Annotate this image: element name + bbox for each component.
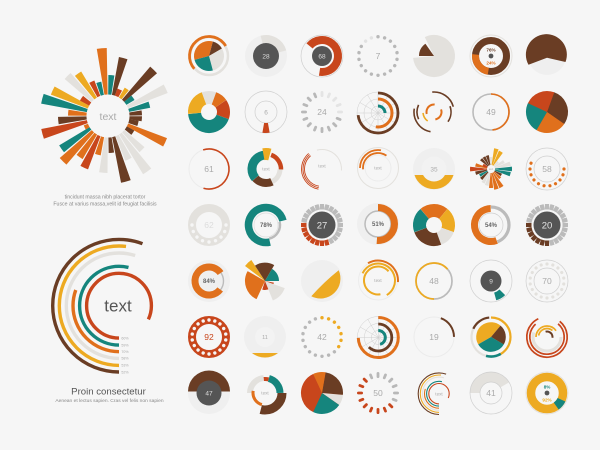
row 1: red ring 68: 68 xyxy=(318,53,326,60)
large concentric arc chart: 58% xyxy=(121,357,129,361)
row 5: yellow arcs text xyxy=(351,253,405,308)
row 3: orange arcs text xyxy=(358,148,398,188)
row 6: disc 11 with yellow sliver xyxy=(244,316,286,358)
row 1: pie with orange ring xyxy=(181,28,237,84)
sunburst caption: Fusce at varius massa,velit id feugiat facilisis xyxy=(53,202,157,208)
row 4: teal ring 78% xyxy=(245,204,287,246)
row 7: brown half disc 47: 47 xyxy=(205,390,213,397)
row 5: yellow segment disc xyxy=(301,260,343,302)
row 7: tick ring 50 xyxy=(357,372,399,414)
row 7: mixed donut text xyxy=(247,375,283,411)
row 1: red ring 68 xyxy=(299,33,345,79)
row 1: grey pie with brown wedge xyxy=(420,42,448,70)
row 2: five-segment donut xyxy=(189,92,229,132)
row 5: faint dotted rings 70 xyxy=(526,260,568,302)
row 3: yellow band 35 xyxy=(413,148,455,190)
row 2: thin rings 6 with red marker xyxy=(245,91,287,133)
row 5: rose chart xyxy=(247,263,283,299)
large concentric arc chart: 53% xyxy=(121,364,129,368)
heading: Proin consectetur: Proin consectetur xyxy=(71,386,147,398)
row 3: yellow band 35: 35 xyxy=(430,166,438,173)
row 7: five-slice pie xyxy=(302,372,342,414)
large concentric arc chart: text xyxy=(104,297,132,316)
sunburst caption xyxy=(53,194,157,208)
row 2: tick ring 24 xyxy=(301,91,343,133)
row 6: red dotted ring 92: 92 xyxy=(204,332,214,342)
row 1: donut 76% 24%: 24% xyxy=(486,60,496,66)
row 1: dark disc 28: 28 xyxy=(262,53,270,60)
row 6: dot ring 42: 42 xyxy=(317,332,327,342)
row 4: orange ring 54%: 54% xyxy=(485,223,498,229)
row 4: five-segment donut 2 xyxy=(414,205,454,245)
row 3: red thin arcs text: text xyxy=(318,164,326,169)
row 1: dark disc 28 xyxy=(245,35,287,77)
row 3: orange dot ring 58 xyxy=(526,148,568,190)
large concentric arc chart: 59% xyxy=(121,343,129,347)
row 3: mixed donut text xyxy=(246,149,286,189)
row 5: yellow grey ring 48 xyxy=(416,263,452,299)
row 2: thin rings 6 with red marker: 6 xyxy=(264,109,268,116)
row 7: tick ring 50: 50 xyxy=(373,388,383,398)
row 7: mini concentric arcs text: text xyxy=(435,391,443,396)
row 2: broken arcs xyxy=(411,89,457,135)
sub-heading text: Aenean et lectus sapien. Cras vel felis non sapien xyxy=(55,398,164,404)
row 4: segmented ring 27 xyxy=(301,204,343,246)
row 7: mixed donut text: text xyxy=(261,391,269,396)
row 2: polar web with arcs xyxy=(357,92,399,134)
row 2: four-slice pie xyxy=(526,92,568,132)
row 1: dot ring 7: 7 xyxy=(376,51,381,61)
row 4: segmented ring 20 xyxy=(526,204,568,246)
row 4: orange half ring 51%: 51% xyxy=(372,222,385,228)
row 6: polar web with arcs 2 xyxy=(357,316,399,358)
row 2: ring 49 xyxy=(473,94,509,130)
large concentric arc chart: 52% xyxy=(121,370,129,374)
row 3: thin ring 61 xyxy=(184,144,234,194)
row 7: yellow donut 8% 92% xyxy=(526,372,568,414)
row 1: brown circle with chevron xyxy=(526,34,567,75)
row 5: dark disc 9 xyxy=(468,258,514,304)
large concentric arc chart: 70% xyxy=(121,350,129,354)
row 6: thin ring 19 xyxy=(408,311,460,363)
row 7: grey band ring 41 xyxy=(470,372,512,414)
large concentric arc chart xyxy=(53,239,185,374)
row 5: yellow arcs text: text xyxy=(374,278,382,283)
row 4: teal ring 78%: 78% xyxy=(260,223,273,229)
large sunburst chart xyxy=(45,53,171,179)
row 3: mini sunburst xyxy=(474,152,508,186)
row 7: brown half disc 47 xyxy=(188,370,230,414)
row 1: dot ring 7 xyxy=(357,35,399,77)
row 1: donut 76% 24%: 76% xyxy=(486,48,496,52)
row 3: thin ring 61: 61 xyxy=(204,164,214,174)
large concentric arc chart: 60% xyxy=(121,337,129,341)
row 3: orange dot ring 58: 58 xyxy=(542,164,552,174)
row 5: orange ring 84%: 84% xyxy=(203,279,216,285)
row 6: disc 11 with yellow sliver: 11 xyxy=(262,335,268,341)
row 4: orange half ring 51% xyxy=(357,203,399,245)
row 3: red thin arcs text xyxy=(298,145,346,193)
row 5: faint dotted rings 70: 70 xyxy=(542,276,552,286)
row 1: donut 76% 24% xyxy=(470,35,512,77)
row 6: pie inside ring xyxy=(464,310,518,364)
row 2: tick ring 24: 24 xyxy=(317,107,327,117)
row 4: grey dotted ring 62: 62 xyxy=(204,220,214,230)
large sunburst chart: text xyxy=(100,111,117,123)
row 7: mini concentric arcs text xyxy=(418,373,460,414)
row 3: mini sunburst: text xyxy=(489,167,493,171)
row 7: yellow donut 8% 92%: 8% xyxy=(544,384,550,390)
row 4: segmented ring 27: 27 xyxy=(317,220,327,231)
row 7: yellow donut 8% 92%: 92% xyxy=(542,398,552,402)
row 5: yellow grey ring 48: 48 xyxy=(429,276,439,286)
row 4: grey dotted ring 62 xyxy=(190,208,228,244)
row 5: orange ring 84% xyxy=(188,260,230,302)
row 4: orange ring 54% xyxy=(470,204,512,246)
row 3: mixed donut text: text xyxy=(262,167,270,172)
row 7: grey band ring 41: 41 xyxy=(486,388,496,398)
row 6: thin ring 19: 19 xyxy=(429,332,439,342)
row 6: red and yellow arcs xyxy=(519,309,575,365)
row 5: dark disc 9: 9 xyxy=(489,278,493,285)
row 3: orange arcs text: text xyxy=(374,166,382,171)
row 6: red dotted ring 92 xyxy=(190,318,228,356)
row 2: ring 49: 49 xyxy=(486,107,496,117)
row 6: dot ring 42 xyxy=(301,316,343,358)
row 4: segmented ring 20: 20 xyxy=(542,220,552,231)
sunburst caption: tincidunt massa nibh placerat tortor xyxy=(65,194,146,200)
